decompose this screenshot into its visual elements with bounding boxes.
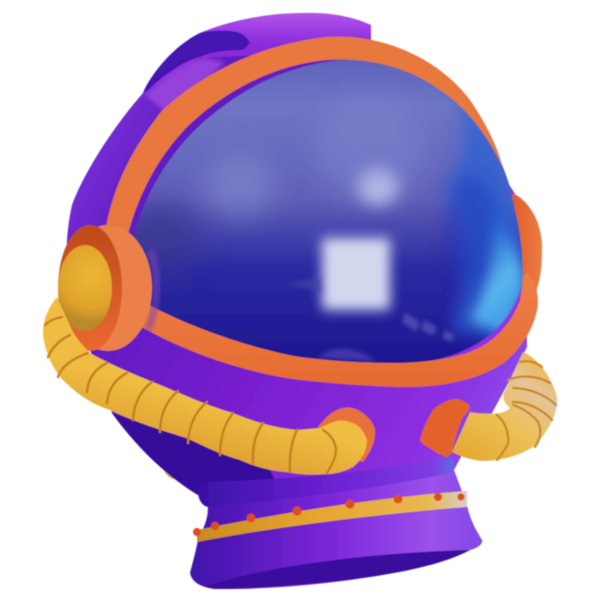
orange visor rim: lower arc [133, 273, 538, 387]
neck upper ring [198, 457, 454, 507]
left ear cup [58, 225, 157, 351]
reflection: bump at bottom [318, 349, 378, 362]
visor glass [122, 59, 530, 365]
reflection: window [322, 238, 390, 310]
orange visor rim: upper arc [105, 37, 503, 234]
right hose connector [420, 399, 470, 457]
reflection: broad glow [317, 114, 422, 198]
left hose connector [318, 407, 375, 462]
left hose [43, 297, 367, 475]
back strap [143, 13, 371, 100]
neck flare [190, 470, 482, 589]
right hose [452, 352, 557, 461]
helmet shell [67, 40, 527, 495]
reflection: arrow shape [293, 278, 324, 292]
reflection: right blue zone [440, 100, 524, 344]
reflection: light spot [358, 168, 398, 204]
small yellow hose piece behind shell [160, 462, 180, 480]
reflection: dashes [402, 312, 455, 342]
reflection: dark left edge [122, 202, 198, 278]
neck band with studs [193, 491, 467, 542]
right ear cup [512, 193, 542, 292]
reflection: sky blue corner [465, 222, 524, 336]
reflection: dark round area [444, 175, 496, 285]
reflection: soft blob left [205, 155, 275, 215]
